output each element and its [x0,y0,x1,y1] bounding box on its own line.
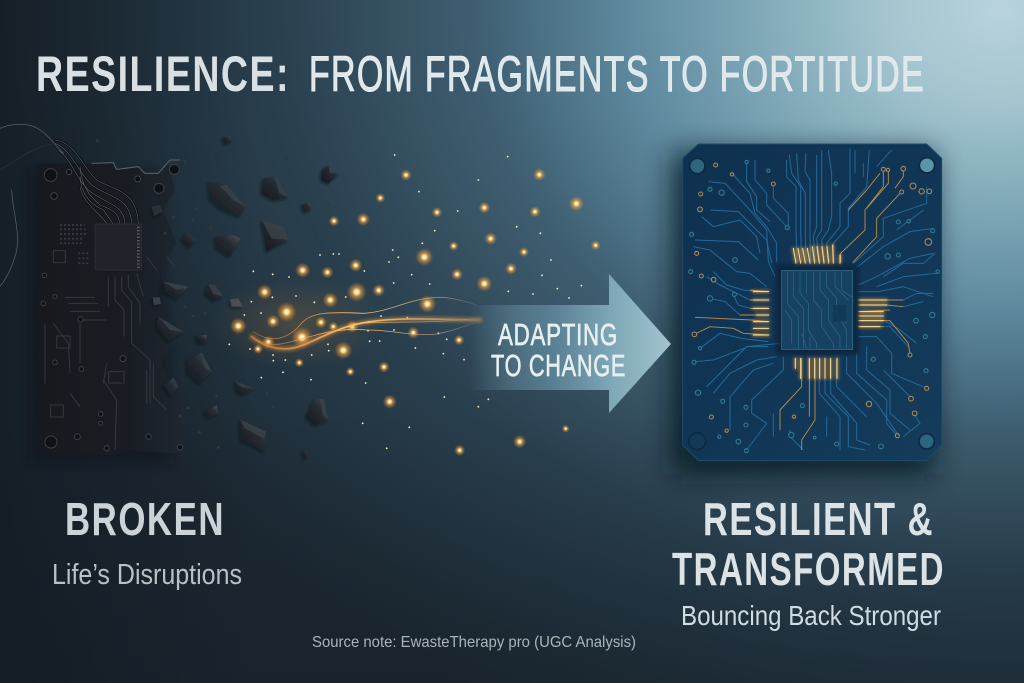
gold and teal vias [692,163,932,438]
label subtitle: life's disruptions: Life’s Disruptions [52,559,242,591]
small sparks [229,155,581,448]
title: RESILIENCE: [36,46,290,102]
arrow label: ADAPTING [498,317,618,352]
fragments and debris [97,136,339,459]
broken board chip [95,224,142,270]
arrow label [491,317,626,383]
blue circuit traces [693,148,937,450]
broken board body [35,162,182,455]
central processor chip [776,265,859,355]
energy stream [252,297,490,349]
panel: resilient circuit board [683,144,942,461]
wire bundle [0,124,138,286]
title [36,46,925,102]
right board drop shadow [672,152,934,474]
glowing gold pins [753,245,887,378]
gold circuit traces [695,168,910,450]
sparks and energy stream [210,155,601,456]
label: resilient and transformed: RESILIENT & [703,493,934,545]
dim board traces and components [45,160,180,450]
label subtitle: bouncing back stronger: Bouncing Back Stronger [681,600,941,631]
mounting holes and vias [41,164,183,451]
loose thin wires [0,124,63,286]
small debris specks [97,141,328,447]
lit facets [158,165,339,438]
arrow: adapting to change [470,274,671,413]
warm haze [210,277,383,370]
panel: broken circuit board [0,124,183,463]
mounting holes [689,158,935,450]
label: resilient and transformed [672,493,945,631]
source note: Source note: EwasteTherapy pro (UGC Analysis) [312,634,636,651]
glowing sparks [230,168,601,456]
label: broken: BROKEN [65,493,225,545]
arrow label: TO CHANGE [491,348,626,383]
label: broken [52,493,242,591]
solder pad grid [60,225,88,263]
resilient board body [683,144,942,461]
